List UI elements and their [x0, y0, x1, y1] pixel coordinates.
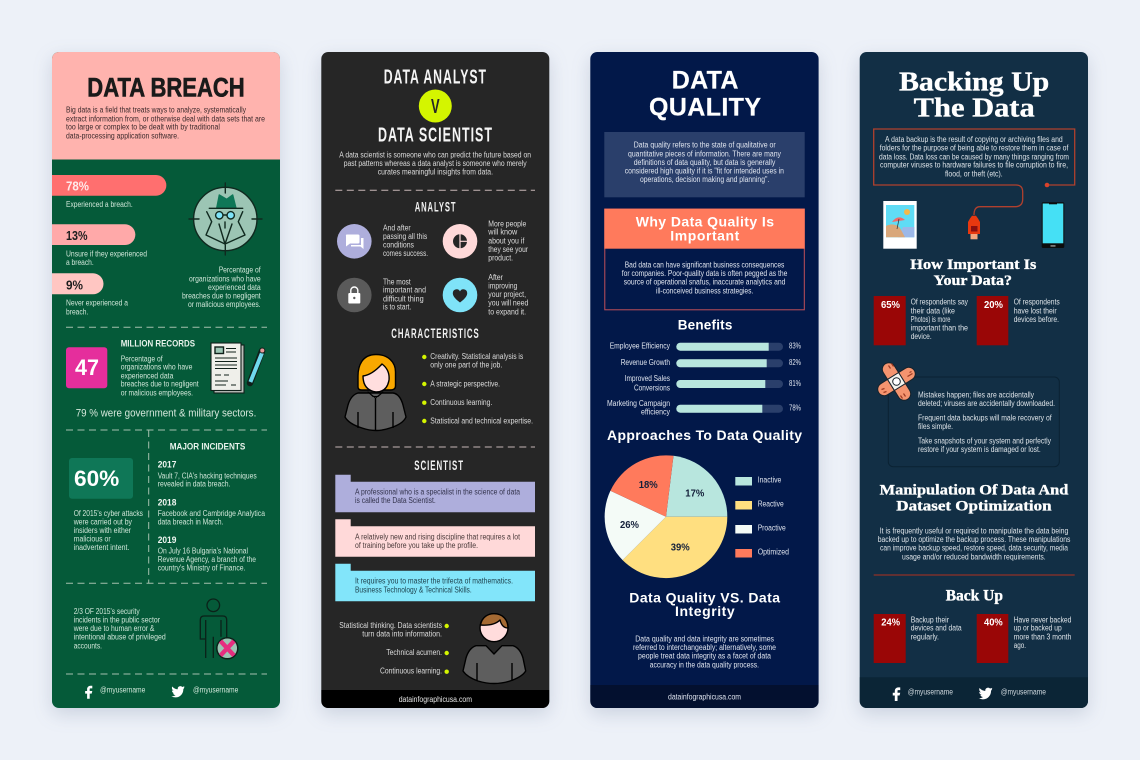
stat: 40%: up or backed up [1014, 624, 1062, 633]
scientist card: cyan [335, 564, 535, 601]
bar chart: benefits: Conversions [634, 383, 670, 392]
intro text [879, 135, 1069, 178]
scientist card: cyan: Business Technology & Technical Skills. [355, 585, 472, 594]
heading: scientist: SCIENTIST [414, 458, 464, 473]
badge: v [419, 90, 452, 122]
characteristics list: only one part of the job. [430, 361, 502, 370]
footer: website [321, 690, 549, 708]
intro box: considered high quality if it is "fit for intended uses in [625, 166, 784, 175]
analyst item: chat: And after [383, 223, 411, 232]
stat: 65%: Photos) is more [911, 315, 950, 324]
caption: percentage of organizations: or malicious employees. [188, 300, 261, 309]
million records text: Percentage of [121, 354, 163, 363]
analyst item: pie: product. [488, 253, 513, 262]
million records text: breaches due to negligent [121, 380, 199, 389]
social links: @myusername [193, 686, 238, 695]
stat: 20%: have lost their [1014, 306, 1057, 315]
stat bar: 13% [52, 224, 147, 267]
intro text: extract information from, or otherwise deal with data sets that are [66, 114, 265, 123]
title: The Data [914, 93, 1035, 123]
panel: data breach [52, 52, 280, 708]
major incidents timeline: country's Ministry of Finance. [158, 564, 245, 573]
connector: cable outline box [874, 129, 1075, 215]
security incidents text: incidents in the public sector [74, 615, 160, 624]
stat: 65%: device. [911, 332, 932, 341]
cyber attacks text: were carried out by [73, 517, 132, 526]
callout: why data quality is important: Why Data Quality Is [636, 214, 774, 230]
stat: 40%: Have never backed [1014, 615, 1071, 624]
heading: quality vs integrity [629, 589, 780, 619]
title [899, 66, 1049, 123]
cyber attacks text: insiders with either [74, 526, 131, 535]
stat bar: 13%: 13% [66, 229, 88, 243]
stat: 20%: devices before. [1014, 315, 1059, 324]
stat box: 47 [66, 347, 107, 388]
title: QUALITY [649, 93, 761, 121]
bar chart: benefits: Marketing Campaign [607, 399, 670, 408]
bar chart: benefits: 81% [789, 379, 801, 388]
major incidents timeline: 2018 [158, 497, 176, 508]
major incidents timeline: Vault 7, CIA's hacking techniques [158, 471, 257, 480]
security incidents text: accounts. [74, 641, 102, 650]
major incidents timeline: Revenue Agency, a branch of the [158, 555, 256, 564]
stat: 40%: 40% [984, 616, 1003, 628]
stat box: 60% [69, 458, 133, 499]
analyst item: chat: passing all this [383, 232, 427, 241]
cyber attacks text: inadvertent intent. [74, 543, 129, 552]
body text: quality vs integrity: accuracy in the data quality process. [650, 660, 759, 669]
body text: quality vs integrity [633, 635, 776, 669]
stat: 65%: their data (like [911, 306, 955, 315]
security incidents text: intentional abuse of privileged [74, 633, 166, 642]
bar chart: benefits [607, 342, 801, 417]
analyst item: lock [337, 277, 426, 312]
tips box: Mistakes happen; files are accidentally [918, 390, 1034, 399]
major incidents timeline: Facebook and Cambridge Analytica [158, 509, 266, 518]
panel: backing up the data [860, 52, 1088, 708]
intro box: Data quality refers to the state of qualitative or [634, 141, 776, 150]
tips box: Take snapshots of your system and perfectly [918, 437, 1051, 446]
analyst item: heart: to expand it. [488, 307, 526, 316]
heading: manipulation: Manipulation Of Data And [880, 482, 1069, 498]
pie chart: approaches: 26% [620, 519, 640, 531]
scientist traits list: turn data into information. [362, 630, 442, 639]
major incidents timeline: data breach in March. [158, 517, 223, 526]
stat: 24% [874, 614, 962, 663]
heading: approaches: Approaches To Data Quality [607, 427, 802, 443]
social links: @myusername [100, 686, 145, 695]
security incidents text: 2/3 OF 2015's security [74, 607, 140, 616]
icon: photo [883, 201, 917, 249]
major incidents timeline: revealed in data breach. [158, 480, 230, 489]
bar chart: benefits: 78% [789, 403, 801, 412]
analyst item: lock: difficult thing [383, 294, 424, 303]
stat bar: 9%: 9% [66, 278, 83, 292]
heading: quality vs integrity: Integrity [675, 603, 735, 619]
stat: 40% [977, 614, 1071, 663]
stat box: 47: 47 [75, 355, 99, 380]
social links [85, 686, 238, 699]
title: Backing Up [899, 66, 1049, 96]
stat: 65%: Of respondents say [911, 298, 968, 307]
bar chart: benefits: Employee Efficiency [610, 342, 670, 351]
heading: how important: How Important Is [910, 257, 1036, 273]
bar chart: benefits: Improved Sales [625, 374, 670, 383]
icon: usb plug [968, 216, 980, 239]
callout: why data quality is important: ill-conceived business strategies. [656, 286, 753, 295]
analyst item: pie: More people [488, 219, 526, 228]
intro text: computer viruses to hardware failures to file corruption to fire, [880, 161, 1068, 170]
caption: percentage of organizations: breaches due to negligent [182, 291, 261, 300]
header block: data breach [52, 52, 280, 160]
stat bar: 9%: breach. [66, 307, 88, 316]
footer: website: datainfographicusa.com [399, 695, 472, 704]
heading: benefits: Benefits [678, 317, 732, 332]
footer: social links [860, 677, 1088, 708]
major incidents timeline: MAJOR INCIDENTS [170, 441, 245, 452]
cyber attacks text: Of 2015's cyber attacks [74, 509, 143, 518]
stat bar: 13%: a breach. [66, 258, 94, 267]
body text: manipulation: It is frequently useful or required to manipulate the data being [880, 527, 1068, 536]
body text: quality vs integrity: people treat data integrity as a facet of data [638, 652, 772, 661]
caption: percentage of organizations: experienced data [208, 283, 261, 292]
major incidents timeline: 2019 [158, 535, 176, 546]
heading: analyst: ANALYST [415, 199, 456, 214]
analyst item: heart: improving [488, 282, 517, 291]
stat bar: 78%: 78% [66, 179, 89, 193]
bar chart: benefits: efficiency [641, 408, 670, 417]
tips box [888, 377, 1059, 467]
major incidents timeline [158, 441, 266, 573]
stat: 40%: ago. [1014, 641, 1026, 650]
stat bar: 9% [52, 273, 129, 316]
major incidents timeline: 2017 [158, 460, 176, 471]
pie chart: approaches: 17% [685, 488, 705, 500]
footer: social links: @myusername [908, 687, 953, 696]
analyst item: pie: they see your [488, 245, 528, 254]
body text: manipulation: usage and/or reduced bandwidth requirements. [902, 552, 1046, 561]
intro text: too large or complex to be dealt with by traditional [66, 123, 220, 132]
pie legend [735, 476, 789, 558]
heading: manipulation: Dataset Optimization [896, 498, 1052, 514]
callout: why data quality is important [604, 209, 805, 310]
scientist traits list [339, 621, 449, 676]
badge: v: V [431, 96, 440, 118]
footer: website: datainfographicusa.com [668, 692, 741, 701]
stat bar: 78% [52, 175, 166, 209]
tips box: files simple. [918, 422, 953, 431]
stat: 40%: more than 3 month [1014, 632, 1071, 641]
analyst item: heart: After [488, 273, 503, 282]
body text: quality vs integrity: Data quality and data integrity are sometimes [635, 635, 774, 644]
analyst item: chat [337, 223, 428, 259]
icon: crossed bandages [875, 360, 918, 403]
security incidents text: were due to human error & [73, 624, 155, 633]
intro text: A data scientist is someone who can predict the future based on [339, 150, 531, 159]
stat bar: 78%: Experienced a breach. [66, 200, 133, 209]
intro text [339, 150, 531, 176]
caption: percentage of organizations: Percentage of [219, 266, 261, 275]
intro text [66, 106, 265, 140]
million records text: or malicious employees. [121, 388, 193, 397]
stat: 24%: Backup their [911, 615, 949, 624]
tips box: deleted; viruses are accidentally downloaded. [918, 399, 1055, 408]
million records text: MILLION RECORDS [121, 339, 195, 350]
pie legend: Inactive [758, 476, 781, 485]
scientist card: cyan: It requires you to master the trifecta of mathematics. [355, 577, 513, 586]
cyber attacks text: malicious or [74, 535, 111, 544]
title: data analyst: DATA ANALYST [384, 67, 487, 89]
cyber attacks text [73, 509, 143, 552]
callout: why data quality is important: Important [670, 227, 740, 243]
analyst item: chat: conditions [383, 240, 414, 249]
bar chart: benefits: 83% [789, 342, 801, 351]
stat box: 60%: 60% [74, 466, 119, 491]
heading: manipulation [880, 482, 1069, 514]
scientist traits list: Technical acumen. [386, 648, 442, 657]
analyst item: lock: is to start. [383, 303, 411, 312]
footer: website [590, 685, 819, 708]
intro text: past patterns whereas a data analyst is someone who merely [344, 159, 527, 168]
characteristics list: A strategic perspective. [430, 379, 500, 388]
stat: 24%: devices and data [911, 624, 962, 633]
icon: phone [1042, 202, 1064, 248]
bar chart: benefits: Revenue Growth [621, 358, 670, 367]
heading: how important [910, 257, 1036, 289]
intro text: A data backup is the result of copying or archiving files and [885, 135, 1063, 144]
analyst item: chat: comes success. [383, 249, 428, 258]
analyst item: lock: The most [383, 277, 411, 286]
title: data scientist: DATA SCIENTIST [378, 125, 493, 147]
scientist card: purple: is called the Data Scientist. [355, 496, 436, 505]
panel: data analyst v data scientist [321, 52, 549, 708]
analyst item: heart [443, 273, 528, 316]
body text: manipulation: can improve backup speed, restore speed, data security, media [880, 544, 1069, 553]
intro text: Big data is a field that treats ways to analyze, systematically [66, 106, 246, 115]
callout: why data quality is important: Bad data can have significant business consequences [625, 261, 784, 270]
title [649, 66, 761, 121]
pie legend: Reactive [758, 500, 784, 509]
stat bar: 13%: Unsure if they experienced [66, 249, 147, 258]
stat: 24%: 24% [881, 616, 901, 628]
icon: document and pen [211, 343, 265, 393]
characteristics list: Creativity. Statistical analysis is [430, 352, 523, 361]
stat: 20%: Of respondents [1014, 298, 1060, 307]
million records text [121, 339, 199, 397]
icon: woman analyst [345, 354, 406, 431]
intro box: operations, decision making and planning". [640, 175, 769, 184]
scientist card: pink: A relatively new and rising discipline that requires a lot [355, 532, 521, 541]
icon: man scientist [463, 614, 526, 684]
footer: social links: @myusername [1001, 687, 1046, 696]
bar chart: benefits: 82% [789, 358, 801, 367]
heading: characteristics: CHARACTERISTICS [391, 326, 480, 341]
body text: quality vs integrity: referred to interchangeably; alternatively, some [633, 643, 776, 652]
pie chart: approaches [605, 455, 727, 578]
major incidents timeline: On July 16 Bulgaria's National [158, 547, 248, 556]
intro text: data loss. Data loss can be caused by many things ranging from [879, 152, 1069, 161]
analyst item: heart: you will need [488, 299, 528, 308]
intro text: data-processing application software. [66, 131, 179, 140]
icon: person with x badge [200, 599, 238, 659]
scientist card: pink: of training before you take up the profile. [355, 541, 478, 550]
heading: back up: Back Up [946, 587, 1003, 604]
pie legend: Proactive [758, 524, 786, 533]
title: DATA [672, 66, 738, 94]
analyst item: lock: important and [383, 286, 426, 295]
intro text: folders for the purpose of being able to restore them in case of [880, 144, 1069, 153]
stat: 65%: important than the [911, 323, 968, 332]
pie chart: approaches: 18% [639, 479, 658, 491]
stat bar: 9%: Never experienced a [66, 299, 129, 308]
scientist card: pink [335, 519, 535, 557]
scientist card: purple [335, 475, 535, 512]
title: DATA BREACH [87, 73, 245, 103]
security incidents text [73, 607, 166, 650]
analyst item: heart: your project, [488, 290, 526, 299]
heading: quality vs integrity: Data Quality VS. Data [629, 589, 780, 605]
intro box: quantitative pieces of information. There are many [628, 149, 781, 158]
callout: why data quality is important: source of operational snafus, inaccurate analytics and [624, 278, 785, 287]
intro text: curates meaningful insights from data. [378, 167, 493, 176]
icon: spy in crosshair [189, 183, 262, 255]
scientist traits list: Statistical thinking. Data scientists [339, 621, 442, 630]
million records text: organizations who have [121, 363, 192, 372]
tips box: restore if your system is damaged or lost. [918, 445, 1041, 454]
stat: 24%: regularly. [911, 632, 939, 641]
stat: 65% [874, 296, 968, 345]
characteristics list [422, 352, 533, 425]
analyst item: pie: about you if [488, 236, 525, 245]
intro box: definitions of data quality, but data is generally [634, 158, 775, 167]
analyst item: pie: will know [487, 228, 518, 237]
panel: data quality [590, 52, 819, 708]
stat: 20% [977, 296, 1060, 345]
scientist traits list: Continuous learning. [380, 667, 442, 676]
intro text: flood, or theft (etc). [945, 169, 1003, 178]
pie chart: approaches: 39% [671, 542, 690, 554]
stat: 65%: 65% [881, 299, 901, 311]
pie legend: Optimized [758, 548, 789, 557]
stat: 20%: 20% [984, 299, 1004, 311]
million records text: experienced data [121, 371, 174, 380]
heading: how important: Your Data? [934, 273, 1012, 289]
sectors statement: 79 % were government & military sectors. [76, 407, 256, 419]
body text: manipulation: backed up to optimize the backup process. These manipulations [878, 535, 1070, 544]
characteristics list: Statistical and technical expertise. [430, 416, 533, 425]
body text: manipulation [878, 527, 1070, 561]
intro box [604, 132, 805, 197]
callout: why data quality is important: for companies. Poor-quality data is often pegged as the [622, 269, 787, 278]
tips box: Frequent data backups will male recovery of [918, 414, 1052, 423]
characteristics list: Continuous learning. [430, 398, 492, 407]
caption: percentage of organizations: organizations who have [189, 274, 261, 283]
analyst item: pie [443, 219, 528, 262]
scientist card: purple: A professional who is a specialist in the science of data [355, 487, 521, 496]
caption: percentage of organizations [182, 266, 261, 309]
